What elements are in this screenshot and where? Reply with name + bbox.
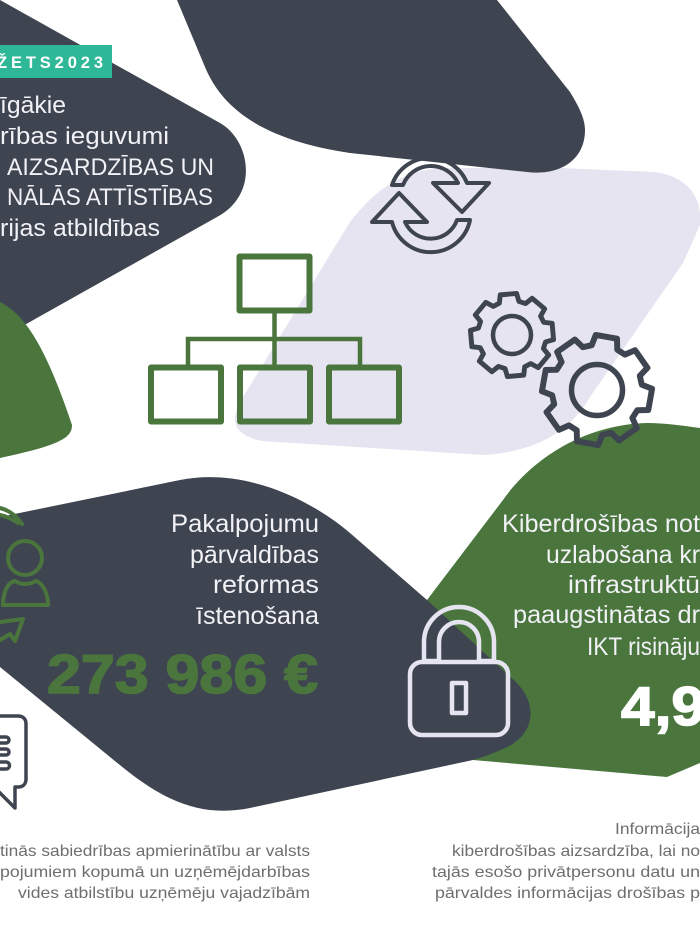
service reform text: [171, 510, 319, 630]
caption: right: Informācija: [615, 821, 700, 838]
dark left panel with heading: [0, 0, 246, 339]
caption: left: [0, 843, 310, 902]
caption: left: vides atbilstību uzņēmēju vajadzībām: [18, 885, 310, 902]
cybersecurity text: infrastruktū: [568, 571, 700, 599]
cybersecurity text: [502, 510, 700, 661]
icon: organisation chart: [151, 256, 399, 422]
tag: budget 2023: ŽETS2023: [0, 53, 103, 72]
service reform text: Pakalpojumu: [171, 510, 319, 538]
icon: chat bubble: [0, 716, 26, 808]
cybersecurity text: uzlabošana kr: [546, 541, 700, 569]
icon: person with arrow: [0, 508, 48, 641]
tag: budget 2023: [0, 45, 112, 78]
amount: service reform: 273 986 €: [47, 643, 318, 705]
heading text: [0, 92, 214, 242]
caption: right: tajās esošo privātpersonu datu un: [432, 864, 700, 881]
caption: right: pārvaldes informācijas drošības p: [435, 885, 700, 902]
heading text: rības ieguvumi: [0, 123, 169, 150]
amount: cybersecurity: 4,9: [621, 675, 700, 737]
cybersecurity text: paaugstinātas dr: [513, 601, 700, 629]
service reform text: reformas: [213, 571, 319, 599]
caption: right: [432, 821, 700, 902]
dark top shape: [177, 0, 585, 173]
dark middle panel with figure: [0, 477, 531, 811]
green bottom-right shape: [380, 423, 700, 777]
icon: padlock: [410, 607, 508, 735]
icon: sync arrows: [372, 158, 489, 252]
heading text: rijas atbildības: [0, 215, 160, 242]
green left shape: [0, 302, 72, 458]
heading text: AIZSARDZĪBAS UN: [7, 154, 214, 181]
service reform text: īstenošana: [196, 602, 319, 630]
heading text: īgākie: [0, 92, 66, 119]
service reform text: pārvaldības: [190, 541, 319, 569]
heading text: NĀLĀS ATTĪSTĪBAS: [7, 184, 213, 211]
cybersecurity text: Kiberdrošības not: [502, 510, 700, 538]
icon: gears: [468, 291, 660, 453]
caption: left: tinās sabiedrības apmierinātību ar valsts: [0, 843, 310, 860]
caption: right: kiberdrošības aizsardzība, lai no: [452, 843, 700, 860]
caption: left: pojumiem kopumā un uzņēmējdarbības: [0, 864, 310, 881]
lavender background shape: [235, 168, 700, 455]
